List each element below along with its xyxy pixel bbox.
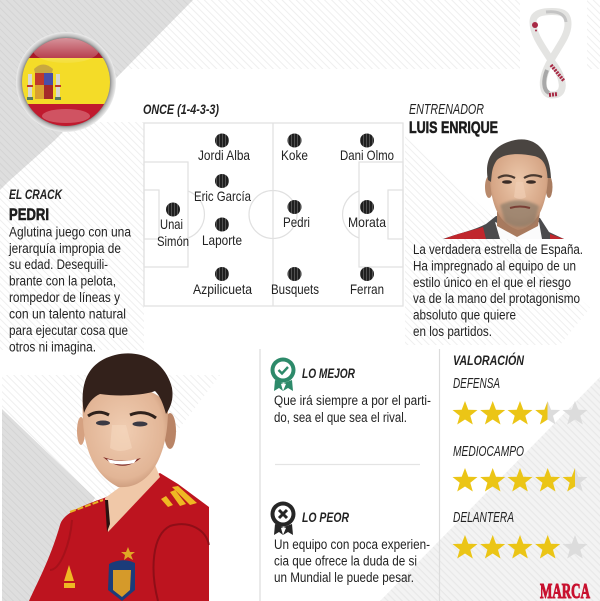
text block: coach description: estilo único en el que el riesgo bbox=[413, 275, 571, 291]
text: lo peor: Un equipo con poca experien- bbox=[274, 537, 430, 553]
rating: mediocampo: MEDIOCAMPO bbox=[453, 444, 524, 460]
text block: Pedri description: con un talento natural bbox=[9, 306, 126, 322]
player names: Eric García bbox=[194, 189, 251, 204]
panel: valoración bbox=[452, 351, 588, 558]
panel: lo mejor bbox=[270, 358, 431, 426]
panel: lo peor bbox=[270, 502, 430, 586]
player names: Pedri bbox=[283, 215, 310, 230]
text block: Pedri description: su edad. Desequili- bbox=[9, 257, 108, 273]
player names: Morata bbox=[348, 215, 386, 230]
text: lo mejor: do, sea el que sea el rival. bbox=[274, 410, 407, 426]
rating: defensa: DEFENSA bbox=[453, 376, 500, 392]
flag badge: Spain bbox=[16, 32, 116, 132]
rating: defensa bbox=[452, 376, 588, 424]
photo: Pedri bbox=[29, 353, 209, 601]
text: lo mejor bbox=[274, 393, 431, 426]
text block: Pedri description: para ejecutar cosa que bbox=[9, 323, 128, 339]
heading: lo peor: LO PEOR bbox=[302, 510, 350, 526]
text block: coach description: en los partidos. bbox=[413, 324, 492, 340]
rating: delantera bbox=[452, 510, 588, 558]
player names: Laporte bbox=[202, 233, 242, 248]
icon: green rosette bbox=[270, 358, 296, 391]
panel: football pitch lineup bbox=[144, 123, 403, 306]
text block: coach description bbox=[413, 242, 583, 340]
coach heading: LUIS ENRIQUE bbox=[409, 118, 498, 137]
text block: Pedri description: Aglutina juego con una bbox=[9, 224, 131, 240]
rating: mediocampo bbox=[452, 444, 588, 492]
player names: Unai bbox=[160, 217, 183, 232]
player names: Koke bbox=[281, 148, 308, 163]
player names: Dani Olmo bbox=[340, 148, 394, 163]
player names: Jordi Alba bbox=[198, 148, 250, 163]
text: lo peor: cia que ofrece la duda de si bbox=[274, 554, 417, 570]
player names: Busquets bbox=[271, 282, 319, 297]
text block: Pedri description bbox=[8, 224, 131, 356]
star player heading: PEDRI bbox=[9, 205, 49, 224]
heading: valoración: VALORACIÓN bbox=[453, 351, 525, 369]
player names: Simón bbox=[157, 234, 189, 249]
rating: delantera: DELANTERA bbox=[453, 510, 514, 526]
coat of arms bbox=[27, 64, 61, 100]
World Cup Qatar 2022 logo bbox=[532, 12, 568, 95]
pitch markings bbox=[144, 123, 403, 306]
heading: once: ONCE (1-4-3-3) bbox=[143, 102, 219, 118]
star player heading bbox=[9, 187, 63, 224]
player names bbox=[157, 148, 394, 297]
coach heading bbox=[409, 102, 498, 137]
divider lines bbox=[260, 349, 440, 601]
text: lo peor: un Mundial le puede pesar. bbox=[274, 570, 414, 586]
text block: Pedri description: rompedor de líneas y bbox=[9, 290, 121, 306]
player names: Azpilicueta bbox=[193, 282, 252, 297]
star player heading: EL CRACK bbox=[9, 187, 63, 203]
heading: lo mejor: LO MEJOR bbox=[302, 366, 356, 382]
text block: coach description: absoluto que quiere bbox=[413, 308, 516, 324]
text block: Pedri description: otros ni imagina. bbox=[9, 340, 96, 356]
player markers bbox=[166, 134, 374, 281]
text: lo mejor: Que irá siempre a por el parti- bbox=[274, 393, 431, 409]
coach heading: ENTRENADOR bbox=[409, 102, 484, 118]
text: lo peor bbox=[274, 537, 430, 586]
text block: Pedri description: jerarquía impropia de bbox=[8, 241, 121, 257]
player names: Ferran bbox=[350, 282, 384, 297]
icon: black rosette bbox=[270, 502, 296, 535]
photo: Luis Enrique bbox=[443, 139, 564, 239]
text block: Pedri description: brante con la pelota, bbox=[9, 274, 116, 290]
